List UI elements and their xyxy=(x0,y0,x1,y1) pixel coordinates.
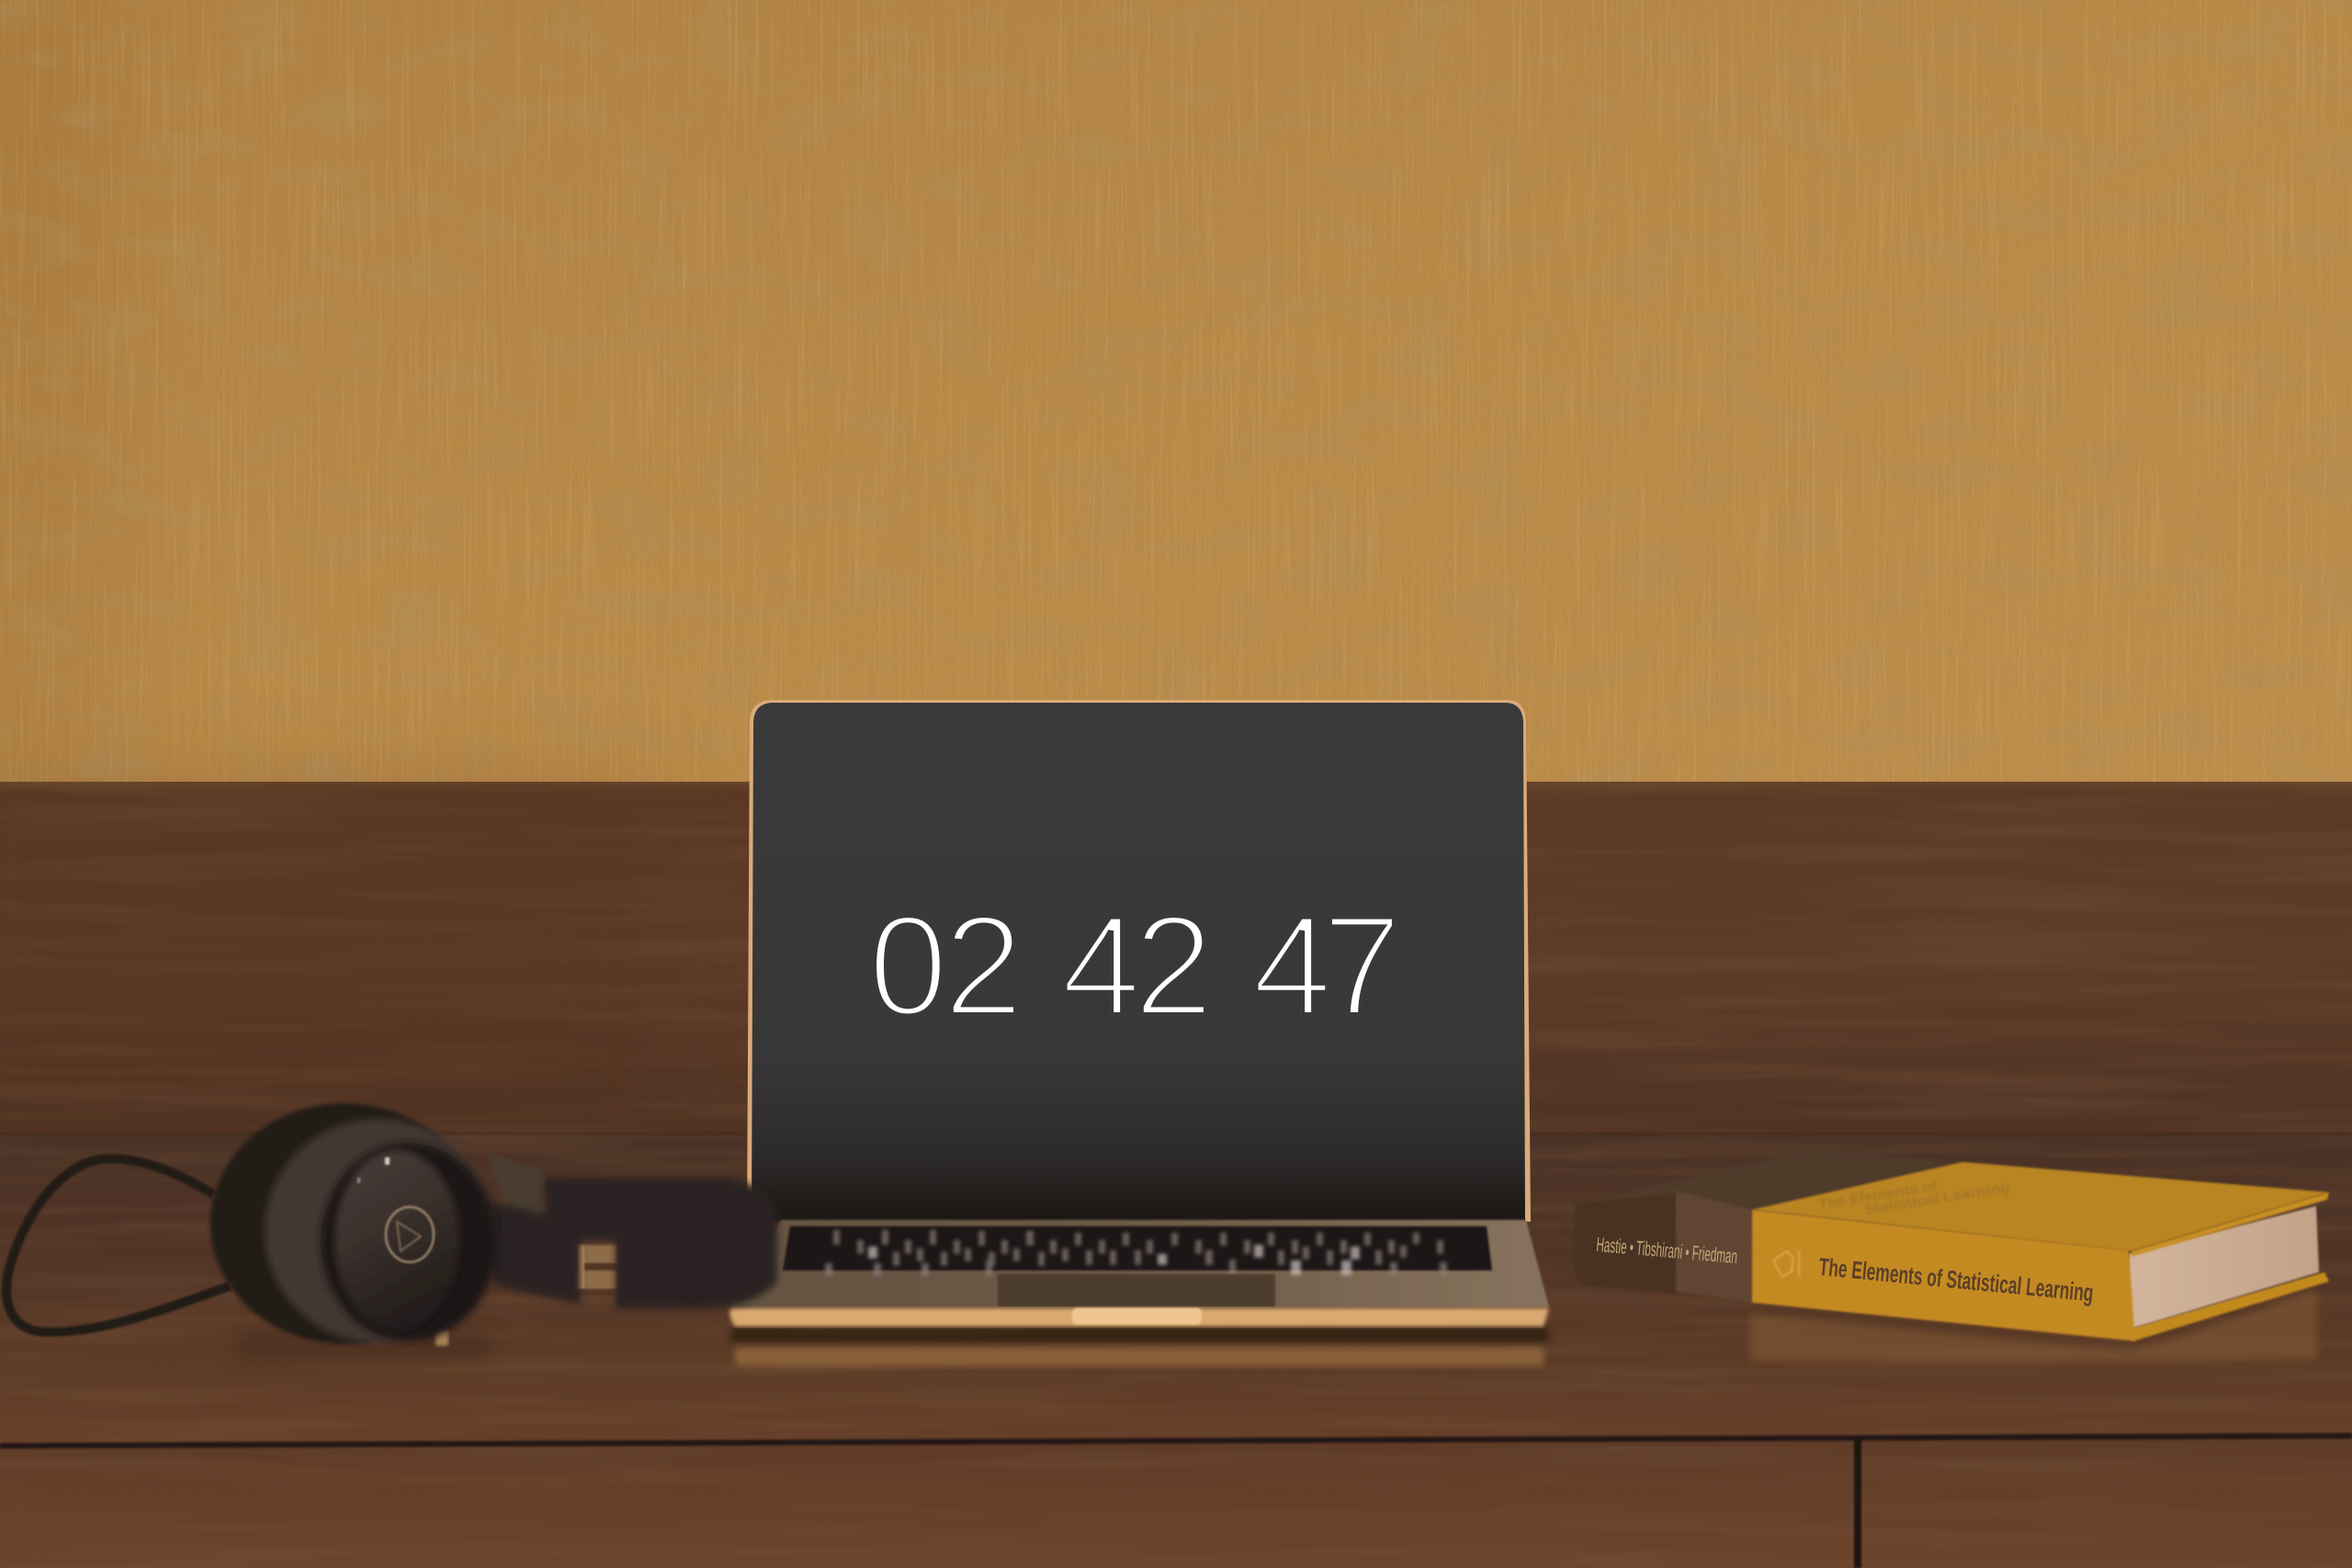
lower cover edge xyxy=(2126,1272,2329,1341)
clock readout: 02 42 47 xyxy=(0,886,1402,1046)
book xyxy=(1574,1150,2329,1341)
spine authors: Hastie • Tibshirani • Friedman xyxy=(1596,1233,1738,1268)
cover title: Statistical Learning xyxy=(1863,1179,2011,1218)
grey yoke trapezoid xyxy=(487,1153,544,1214)
cover title xyxy=(1817,1179,2011,1218)
headband slider highlights xyxy=(575,1245,617,1289)
spine title: The Elements of Statistical Learning xyxy=(1817,1253,2095,1307)
laptop screen xyxy=(752,703,1525,1222)
keyboard deck xyxy=(729,1220,1549,1307)
cable xyxy=(6,1158,230,1332)
headphones xyxy=(6,1103,777,1359)
spine dark section xyxy=(1574,1194,1676,1293)
desk front with drawer fronts xyxy=(0,1433,2352,1568)
earcup logo xyxy=(386,1207,434,1262)
laptop xyxy=(0,700,1549,1326)
headband xyxy=(459,1178,777,1309)
keyboard xyxy=(783,1226,1492,1276)
earcup dark ring xyxy=(321,1143,497,1341)
front cover top xyxy=(1752,1162,2329,1251)
laptop front edge xyxy=(729,1308,1549,1326)
cover edge highlight xyxy=(2132,1192,2329,1257)
keys xyxy=(825,1230,1447,1276)
laptop notch xyxy=(1072,1308,1202,1325)
spine mid section xyxy=(1676,1190,1752,1303)
cover title: The Elements of xyxy=(1817,1179,1939,1213)
trackpad xyxy=(998,1274,1275,1307)
book reflection xyxy=(1750,1291,2317,1361)
earcup cushion xyxy=(265,1119,492,1343)
page block xyxy=(2126,1206,2319,1330)
spine orange section xyxy=(1752,1210,2135,1341)
wooden back panel xyxy=(0,782,2352,1135)
earcup outer xyxy=(210,1103,479,1344)
spine publisher mark xyxy=(1773,1251,1799,1277)
earcup plate xyxy=(334,1150,459,1330)
linen wall background xyxy=(0,0,2352,785)
laptop lid rim xyxy=(747,700,1531,1222)
highlight below earcup xyxy=(435,1329,448,1346)
shadow under headphones xyxy=(237,1332,491,1359)
earcup glints xyxy=(357,1157,390,1183)
desk top surface xyxy=(0,1132,2352,1446)
back cover top xyxy=(1576,1150,1962,1213)
laptop reflection on desk xyxy=(730,1327,1548,1366)
